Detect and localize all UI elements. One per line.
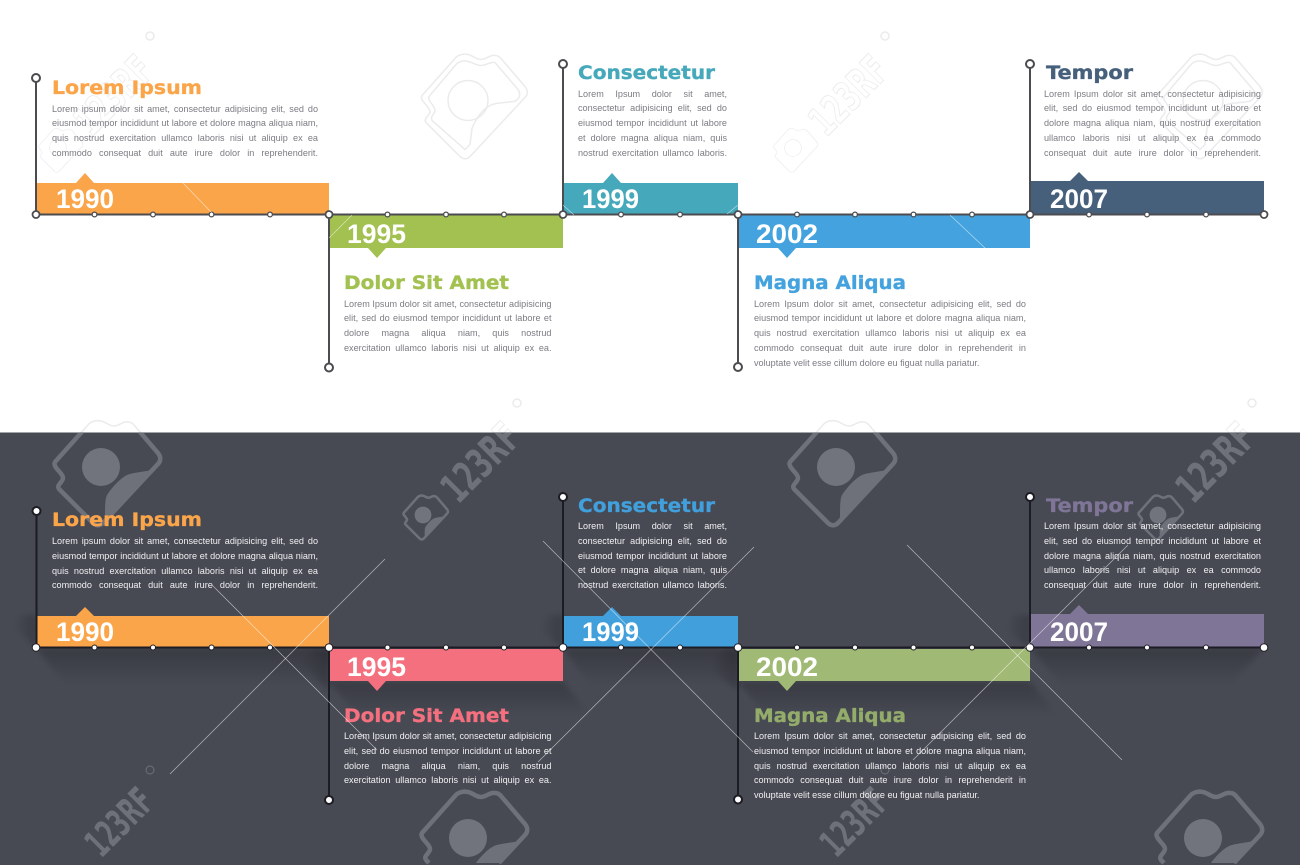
milestone: 2007 light — [1026, 60, 1264, 214]
milestone: 1999 light: et dolore magna aliqua niam, quis — [578, 133, 727, 143]
panel: light timeline — [32, 60, 1268, 372]
milestone: 2007 light: Lorem Ipsum dolor sit amet, consectetur adipisicing — [1044, 88, 1261, 98]
milestone: 1990 light: Lorem ipsum dolor sit amet, consectetur adipisicing elit, sed do — [52, 104, 318, 114]
milestone: 1995 light: Dolor Sit Amet — [344, 272, 509, 294]
milestone: 1990 dark: quis nostrud exercitation ullamco laboris nisi ut aliquip ex ea — [52, 566, 318, 576]
long shadows — [14, 615, 1264, 715]
milestone: 1999 dark: nostrud exercitation ullamco laboris. — [578, 580, 727, 590]
milestone: 1990 dark: 1990 — [56, 617, 114, 647]
watermarks: dark section: 123RF — [76, 779, 163, 865]
panel: dark timeline — [14, 493, 1268, 805]
milestone: 2002 dark — [734, 648, 1030, 805]
milestone: 1995 dark: elit, sed do eiusmod tempor incididunt ut labore et — [344, 746, 552, 756]
milestone: 2007 light: consequat duit aute irure dolor in reprehenderit. — [1044, 148, 1261, 158]
milestone: 1990 light: eiusmod tempor incididunt ut labore et dolore magna aliqua niam, — [52, 118, 318, 128]
milestone: 2007 dark: Tempor — [1046, 495, 1134, 517]
panel: dark background — [0, 432, 1300, 865]
milestone: 1990 light: 1990 — [56, 184, 114, 214]
milestone: 1995 light: 1995 — [347, 219, 406, 249]
milestone: 2002 dark: commodo consequat duit aute irure dolor in reprehenderit in — [754, 775, 1026, 785]
milestone: 1999 dark: et dolore magna aliqua niam, quis — [578, 565, 727, 575]
watermarks: light section: 123RF — [431, 413, 530, 512]
milestone: 1999 light: Lorem Ipsum dolor sit amet, — [578, 88, 727, 98]
milestone: 2007 light: Tempor — [1046, 62, 1134, 84]
parts of the dark-section watermarks that spill onto white — [54, 421, 160, 525]
milestone: 1990 light: commodo consequat duit aute irure dolor in reprehenderit. — [52, 148, 318, 158]
milestone: 2007 light: dolore magna aliqua niam, quis nostrud exercitation — [1044, 118, 1261, 128]
milestone: 1999 light: eiusmod tempor incididunt ut labore — [578, 118, 727, 128]
milestone: 1990 dark — [32, 507, 329, 647]
milestone: 1999 light: nostrud exercitation ullamco laboris. — [578, 148, 727, 158]
milestone: 1999 light: Consectetur — [578, 62, 716, 84]
watermarks: dark section — [54, 413, 1265, 865]
milestone: 1999 dark — [559, 493, 738, 647]
milestone: 2002 dark: eiusmod tempor incididunt ut labore et dolore magna aliqua niam, — [754, 746, 1026, 756]
milestone: 2002 light: Magna Aliqua — [754, 272, 906, 294]
milestone: 1995 light: dolore magna aliqua niam, quis nostrud — [344, 328, 552, 338]
milestone: 1990 dark: eiusmod tempor incididunt ut labore et dolore magna aliqua niam, — [52, 551, 318, 561]
milestone: 1995 dark — [325, 648, 563, 804]
milestone: 2007 dark: consequat duit aute irure dolor in reprehenderit. — [1044, 580, 1261, 590]
milestone: 2007 dark: ullamco laboris nisi ut aliquip ex ea commodo — [1044, 565, 1261, 575]
milestone: 1999 light: 1999 — [582, 184, 639, 214]
milestone: 2007 dark: dolore magna aliqua niam, quis nostrud exercitation — [1044, 550, 1261, 560]
axis: dark timeline line with nodes — [32, 644, 1268, 651]
milestone: 2007 dark: 2007 — [1050, 617, 1108, 647]
milestone: 2002 dark: Lorem Ipsum dolor sit amet, consectetur adipisicing elit, sed do — [754, 731, 1026, 741]
milestone: 2002 light: quis nostrud exercitation ullamco laboris nisi ut aliquip ex ea — [754, 328, 1026, 338]
milestone: 1999 light: consectetur adipisicing elit, sed do — [578, 103, 727, 113]
milestone: 2002 light — [734, 215, 1030, 372]
milestone: 2007 dark: elit, sed do eiusmod tempor incididunt ut labore et — [1044, 536, 1261, 546]
milestone: 1999 dark: consectetur adipisicing elit, sed do — [578, 536, 727, 546]
milestone: 1999 light — [559, 60, 738, 214]
watermarks: dark section: 123RF — [431, 413, 530, 512]
milestone: 1990 dark: commodo consequat duit aute irure dolor in reprehenderit. — [52, 580, 318, 590]
milestone: 1995 dark: exercitation ullamco laboris nisi ut aliquip ex ea. — [344, 775, 552, 785]
milestone: 1995 dark: 1995 — [347, 652, 406, 682]
milestone: 1990 light — [32, 74, 329, 214]
milestone: 2002 light: voluptate velit esse cillum dolore eu figuat nulla pariatur. — [754, 358, 979, 368]
milestone: 2002 dark: voluptate velit esse cillum dolore eu figuat nulla pariatur. — [754, 790, 979, 800]
watermarks: light section: 123RF — [1166, 413, 1265, 512]
milestone: 1999 dark: Lorem Ipsum dolor sit amet, — [578, 521, 727, 531]
milestone: 1990 light: Lorem Ipsum — [52, 77, 202, 99]
milestone: 1995 dark: dolore magna aliqua niam, quis nostrud — [344, 760, 552, 770]
milestone: 1999 dark: eiusmod tempor incididunt ut labore — [578, 550, 727, 560]
milestone: 1999 dark: 1999 — [582, 617, 639, 647]
milestone: 1995 light: elit, sed do eiusmod tempor incididunt ut labore et — [344, 313, 552, 323]
milestone: 2007 dark — [1026, 493, 1264, 647]
watermarks: dark section: 123RF — [811, 779, 898, 865]
milestone: 2002 dark: quis nostrud exercitation ullamco laboris nisi ut aliquip ex ea — [754, 760, 1026, 770]
milestone: 1990 dark: Lorem ipsum dolor sit amet, consectetur adipisicing elit, sed do — [52, 536, 318, 546]
milestone: 1995 light: exercitation ullamco laboris nisi ut aliquip ex ea. — [344, 343, 552, 353]
milestone: 2002 light: 2002 — [756, 219, 818, 249]
watermarks: dark section: 123RF — [1166, 413, 1265, 512]
watermarks: light section: 123RF — [64, 46, 163, 145]
watermarks: light section: 123RF — [799, 46, 898, 145]
milestone: 1995 dark: Lorem Ipsum dolor sit amet, consectetur adipisicing — [344, 731, 552, 741]
watermark diagonal hairlines — [170, 183, 1128, 774]
milestone: 2002 light: Lorem Ipsum dolor sit amet, consectetur adipisicing elit, sed do — [754, 298, 1026, 308]
milestone: 1995 light — [325, 215, 563, 372]
milestone: 1995 dark: Dolor Sit Amet — [344, 705, 509, 727]
milestone: 2002 dark: 2002 — [756, 652, 818, 682]
milestone: 2002 light: commodo consequat duit aute irure dolor in reprehenderit in — [754, 343, 1026, 353]
axis: light timeline line with nodes — [32, 211, 1268, 218]
milestone: 2007 light: ullamco laboris nisi ut aliquip ex ea commodo — [1044, 133, 1261, 143]
milestone: 1990 light: quis nostrud exercitation ullamco laboris nisi ut aliquip ex ea — [52, 133, 318, 143]
milestone: 1999 dark: Consectetur — [578, 495, 716, 517]
milestone: 2007 light: 2007 — [1050, 184, 1108, 214]
watermarks: light section — [38, 32, 1265, 525]
milestone: 2002 dark: Magna Aliqua — [754, 705, 906, 727]
milestone: 2007 light: elit, sed do eiusmod tempor incididunt ut labore et — [1044, 103, 1261, 113]
milestone: 2007 dark: Lorem Ipsum dolor sit amet, consectetur adipisicing — [1044, 521, 1261, 531]
milestone: 1990 dark: Lorem Ipsum — [52, 509, 202, 531]
milestone: 1995 light: Lorem Ipsum dolor sit amet, consectetur adipisicing — [344, 298, 552, 308]
milestone: 2002 light: eiusmod tempor incididunt ut labore et dolore magna aliqua niam, — [754, 313, 1026, 323]
